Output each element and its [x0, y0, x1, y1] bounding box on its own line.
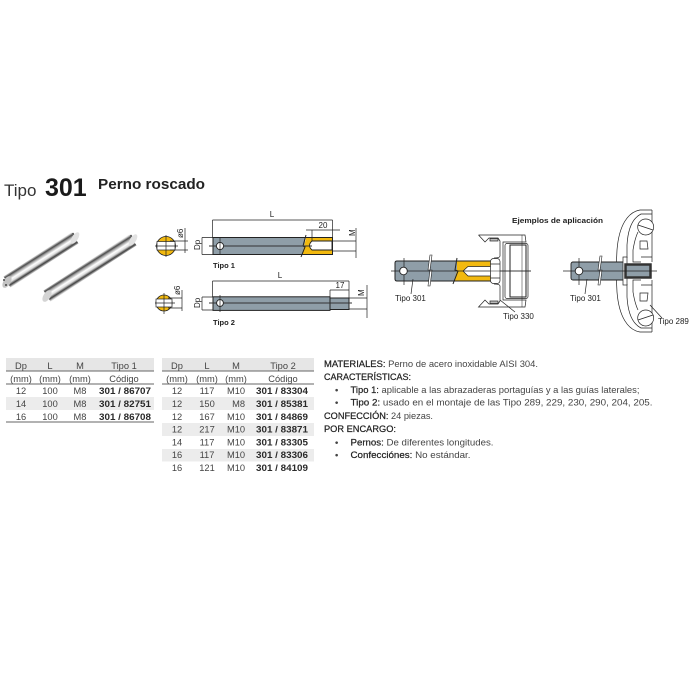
- label Tipo 1: Tipo 1: [213, 261, 235, 270]
- rows Tipo 2: 12: [172, 412, 182, 422]
- labels: Tipo 301: [570, 294, 601, 303]
- rows Tipo 2: M8: [232, 399, 245, 409]
- rows Tipo 2: M10: [227, 450, 245, 460]
- header Tipo 1: [6, 358, 154, 422]
- rows Tipo 1: 301 / 86707: [99, 386, 151, 396]
- title: Tipo: [4, 181, 36, 200]
- title: [4, 174, 205, 202]
- dimensions Tipo 1: [193, 210, 357, 258]
- rows Tipo 2: 167: [199, 412, 215, 422]
- clamp Tipo 330: [478, 235, 531, 307]
- heading: application examples: Ejemplos de aplicación: [512, 216, 603, 225]
- dimensions Tipo 2: 17: [336, 281, 345, 290]
- rows Tipo 1: 14: [16, 399, 26, 409]
- rows Tipo 1: M8: [74, 386, 86, 396]
- rows Tipo 2: 16: [172, 463, 182, 473]
- dimensions Tipo 1: L: [270, 210, 275, 219]
- cross section Tipo 1: [155, 228, 188, 257]
- header Tipo 2: (mm): [225, 374, 247, 384]
- rows Tipo 1: 100: [42, 412, 58, 422]
- header Tipo 1: (mm): [69, 374, 91, 384]
- rows Tipo 2: M10: [227, 412, 245, 422]
- dimensions Tipo 1: Dp: [193, 239, 202, 250]
- bar Tipo 1: [209, 235, 332, 257]
- title: 301: [45, 174, 87, 202]
- labels: [570, 279, 689, 326]
- diagram: application with Tipo 330: [391, 235, 534, 321]
- header Tipo 2: Código: [268, 374, 298, 384]
- rows Tipo 1: 12: [16, 386, 26, 396]
- photo: two threaded pins: [1, 231, 139, 303]
- text block: materials and characteristics: Tipo 1: aplicable a las abrazaderas portaguías y a las guías laterales;: [350, 384, 640, 395]
- text block: materials and characteristics: •: [335, 396, 338, 408]
- rows Tipo 2: M10: [227, 386, 245, 396]
- header Tipo 2: (mm): [196, 374, 218, 384]
- header Tipo 1: Dp: [15, 361, 27, 371]
- rows Tipo 2: 301 / 83304: [256, 386, 309, 396]
- rows Tipo 2: 12: [172, 399, 182, 409]
- rows Tipo 2: 301 / 84869: [256, 412, 308, 422]
- bolt: [563, 256, 657, 285]
- bar Tipo 2: [209, 295, 352, 312]
- rows Tipo 1: [16, 386, 151, 422]
- rows Tipo 2: 12: [172, 386, 182, 396]
- labels: Tipo 330: [503, 312, 534, 321]
- cross section Tipo 2: ø6: [173, 285, 182, 295]
- text block: materials and characteristics: MATERIALES: Perno de acero inoxidable AISI 304.: [324, 358, 538, 369]
- text block: materials and characteristics: Pernos: De diferentes longitudes.: [350, 436, 494, 448]
- rows Tipo 2: M10: [227, 463, 245, 473]
- diagram: Tipo 2 pin: [155, 271, 367, 327]
- rows Tipo 1: 301 / 86708: [99, 412, 151, 422]
- header Tipo 1: Código: [109, 374, 139, 384]
- header Tipo 1: (mm): [10, 374, 32, 384]
- label Tipo 2: Tipo 2: [213, 318, 235, 327]
- rows Tipo 2: [172, 386, 309, 473]
- cross section Tipo 1: ø6: [176, 228, 185, 238]
- header Tipo 1: L: [47, 361, 53, 371]
- rows Tipo 2: 16: [172, 450, 182, 460]
- table: Tipo 1: [6, 358, 154, 422]
- title: Perno roscado: [98, 177, 205, 193]
- rows Tipo 2: 117: [200, 450, 214, 460]
- rows Tipo 1: 301 / 82751: [99, 399, 151, 409]
- text block: materials and characteristics: CONFECCIÓN: 24 piezas.: [324, 410, 433, 421]
- dimensions Tipo 2: Dp: [193, 297, 202, 308]
- rows Tipo 2: M10: [227, 438, 245, 448]
- rows Tipo 2: 217: [199, 424, 215, 434]
- text block: materials and characteristics: [324, 358, 652, 460]
- dimensions Tipo 2: [193, 271, 367, 318]
- rows Tipo 1: M8: [74, 399, 86, 409]
- rows Tipo 1: M8: [74, 412, 86, 422]
- rows Tipo 2: 301 / 83305: [256, 438, 308, 448]
- table: Tipo 2: [162, 358, 314, 473]
- labels: [395, 279, 534, 321]
- text block: materials and characteristics: •: [335, 449, 338, 460]
- rows Tipo 2: 117: [200, 386, 214, 396]
- rows Tipo 2: 301 / 84109: [256, 463, 308, 473]
- header Tipo 2: L: [204, 361, 210, 371]
- dimensions Tipo 1: 20: [319, 221, 328, 230]
- rows Tipo 2: 12: [172, 424, 182, 434]
- rows Tipo 2: 301 / 83871: [256, 424, 308, 434]
- rows Tipo 1: 100: [42, 386, 58, 396]
- rows Tipo 2: 14: [172, 438, 182, 448]
- rows Tipo 1: 16: [16, 412, 26, 422]
- text block: materials and characteristics: CARACTERÍSTICAS:: [324, 371, 411, 382]
- labels: Tipo 301: [395, 294, 426, 303]
- text block: materials and characteristics: POR ENCARGO:: [324, 423, 396, 434]
- rows Tipo 2: 117: [200, 438, 214, 448]
- text block: materials and characteristics: •: [335, 384, 338, 395]
- rows Tipo 2: 301 / 83306: [256, 450, 308, 460]
- text block: materials and characteristics: •: [335, 436, 338, 448]
- labels: Tipo 289: [658, 317, 689, 326]
- header Tipo 2: Dp: [171, 361, 183, 371]
- dimensions Tipo 1: M: [348, 229, 357, 236]
- header Tipo 1: Tipo 1: [111, 361, 137, 371]
- dimensions Tipo 2: M: [357, 289, 366, 296]
- rows Tipo 2: 150: [199, 399, 215, 409]
- header Tipo 1: (mm): [39, 374, 61, 384]
- rows Tipo 2: M10: [227, 424, 245, 434]
- diagram: Tipo 1 pin: [155, 210, 357, 270]
- cross section Tipo 2: [155, 285, 182, 314]
- dimensions Tipo 2: L: [278, 271, 283, 280]
- rows Tipo 2: 121: [199, 463, 215, 473]
- rows Tipo 1: 100: [42, 399, 58, 409]
- diagram: application with Tipo 289: [563, 210, 689, 332]
- bolt with yellow threaded end: [391, 255, 531, 286]
- header Tipo 2: (mm): [166, 374, 188, 384]
- text block: materials and characteristics: Confecciónes: No estándar.: [350, 449, 470, 460]
- rows Tipo 2: 301 / 85381: [256, 399, 308, 409]
- wheel housing Tipo 289: [616, 210, 654, 332]
- header Tipo 2: Tipo 2: [270, 361, 296, 371]
- header Tipo 1: M: [76, 361, 84, 371]
- text block: materials and characteristics: Tipo 2: usado en el montaje de las Tipo 289, 229, 230, 290, 204, 205.: [350, 396, 652, 408]
- header Tipo 2: M: [232, 361, 240, 371]
- header Tipo 2: [162, 358, 314, 462]
